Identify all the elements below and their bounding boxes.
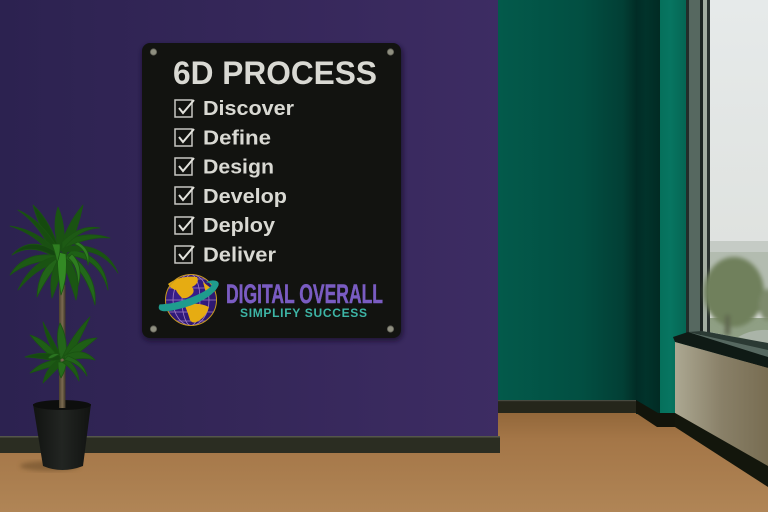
plant shadow on floor — [20, 461, 80, 471]
item: Deliver — [175, 244, 276, 266]
screw top right — [387, 49, 394, 55]
tagline: SIMPLIFY SUCCESS — [240, 306, 367, 320]
right baseboard — [675, 413, 768, 487]
item: Discover: Discover — [203, 97, 294, 120]
item: Design: Design — [203, 156, 274, 178]
item: Design — [175, 156, 274, 178]
lower foliage — [25, 317, 97, 383]
potted plant — [10, 205, 118, 471]
window view — [704, 0, 768, 344]
teal wall — [498, 0, 637, 413]
item: Deploy — [175, 214, 276, 237]
sign panel — [142, 43, 403, 341]
screw top left — [150, 49, 157, 55]
wall panel below sill — [675, 342, 768, 467]
window sill — [673, 332, 768, 368]
screw bottom right — [387, 326, 394, 332]
item: Define — [175, 126, 271, 150]
item: Define: Define — [203, 126, 271, 150]
brand name: DIGITAL OVERALL — [226, 279, 383, 309]
icon: globe with ring — [159, 274, 218, 326]
screw bottom left — [150, 326, 157, 332]
trunk — [59, 285, 66, 410]
pot — [33, 395, 91, 470]
floor — [0, 400, 768, 512]
item: Develop: Develop — [203, 185, 287, 208]
upper foliage — [10, 205, 118, 305]
teal corner return and pillar — [636, 0, 686, 427]
checklist — [175, 97, 294, 266]
window — [686, 0, 768, 362]
item: Deploy: Deploy — [203, 214, 276, 237]
title: 6D PROCESS — [173, 55, 377, 91]
item: Deliver: Deliver — [203, 244, 276, 266]
purple wall — [0, 0, 500, 453]
logo — [159, 274, 383, 326]
